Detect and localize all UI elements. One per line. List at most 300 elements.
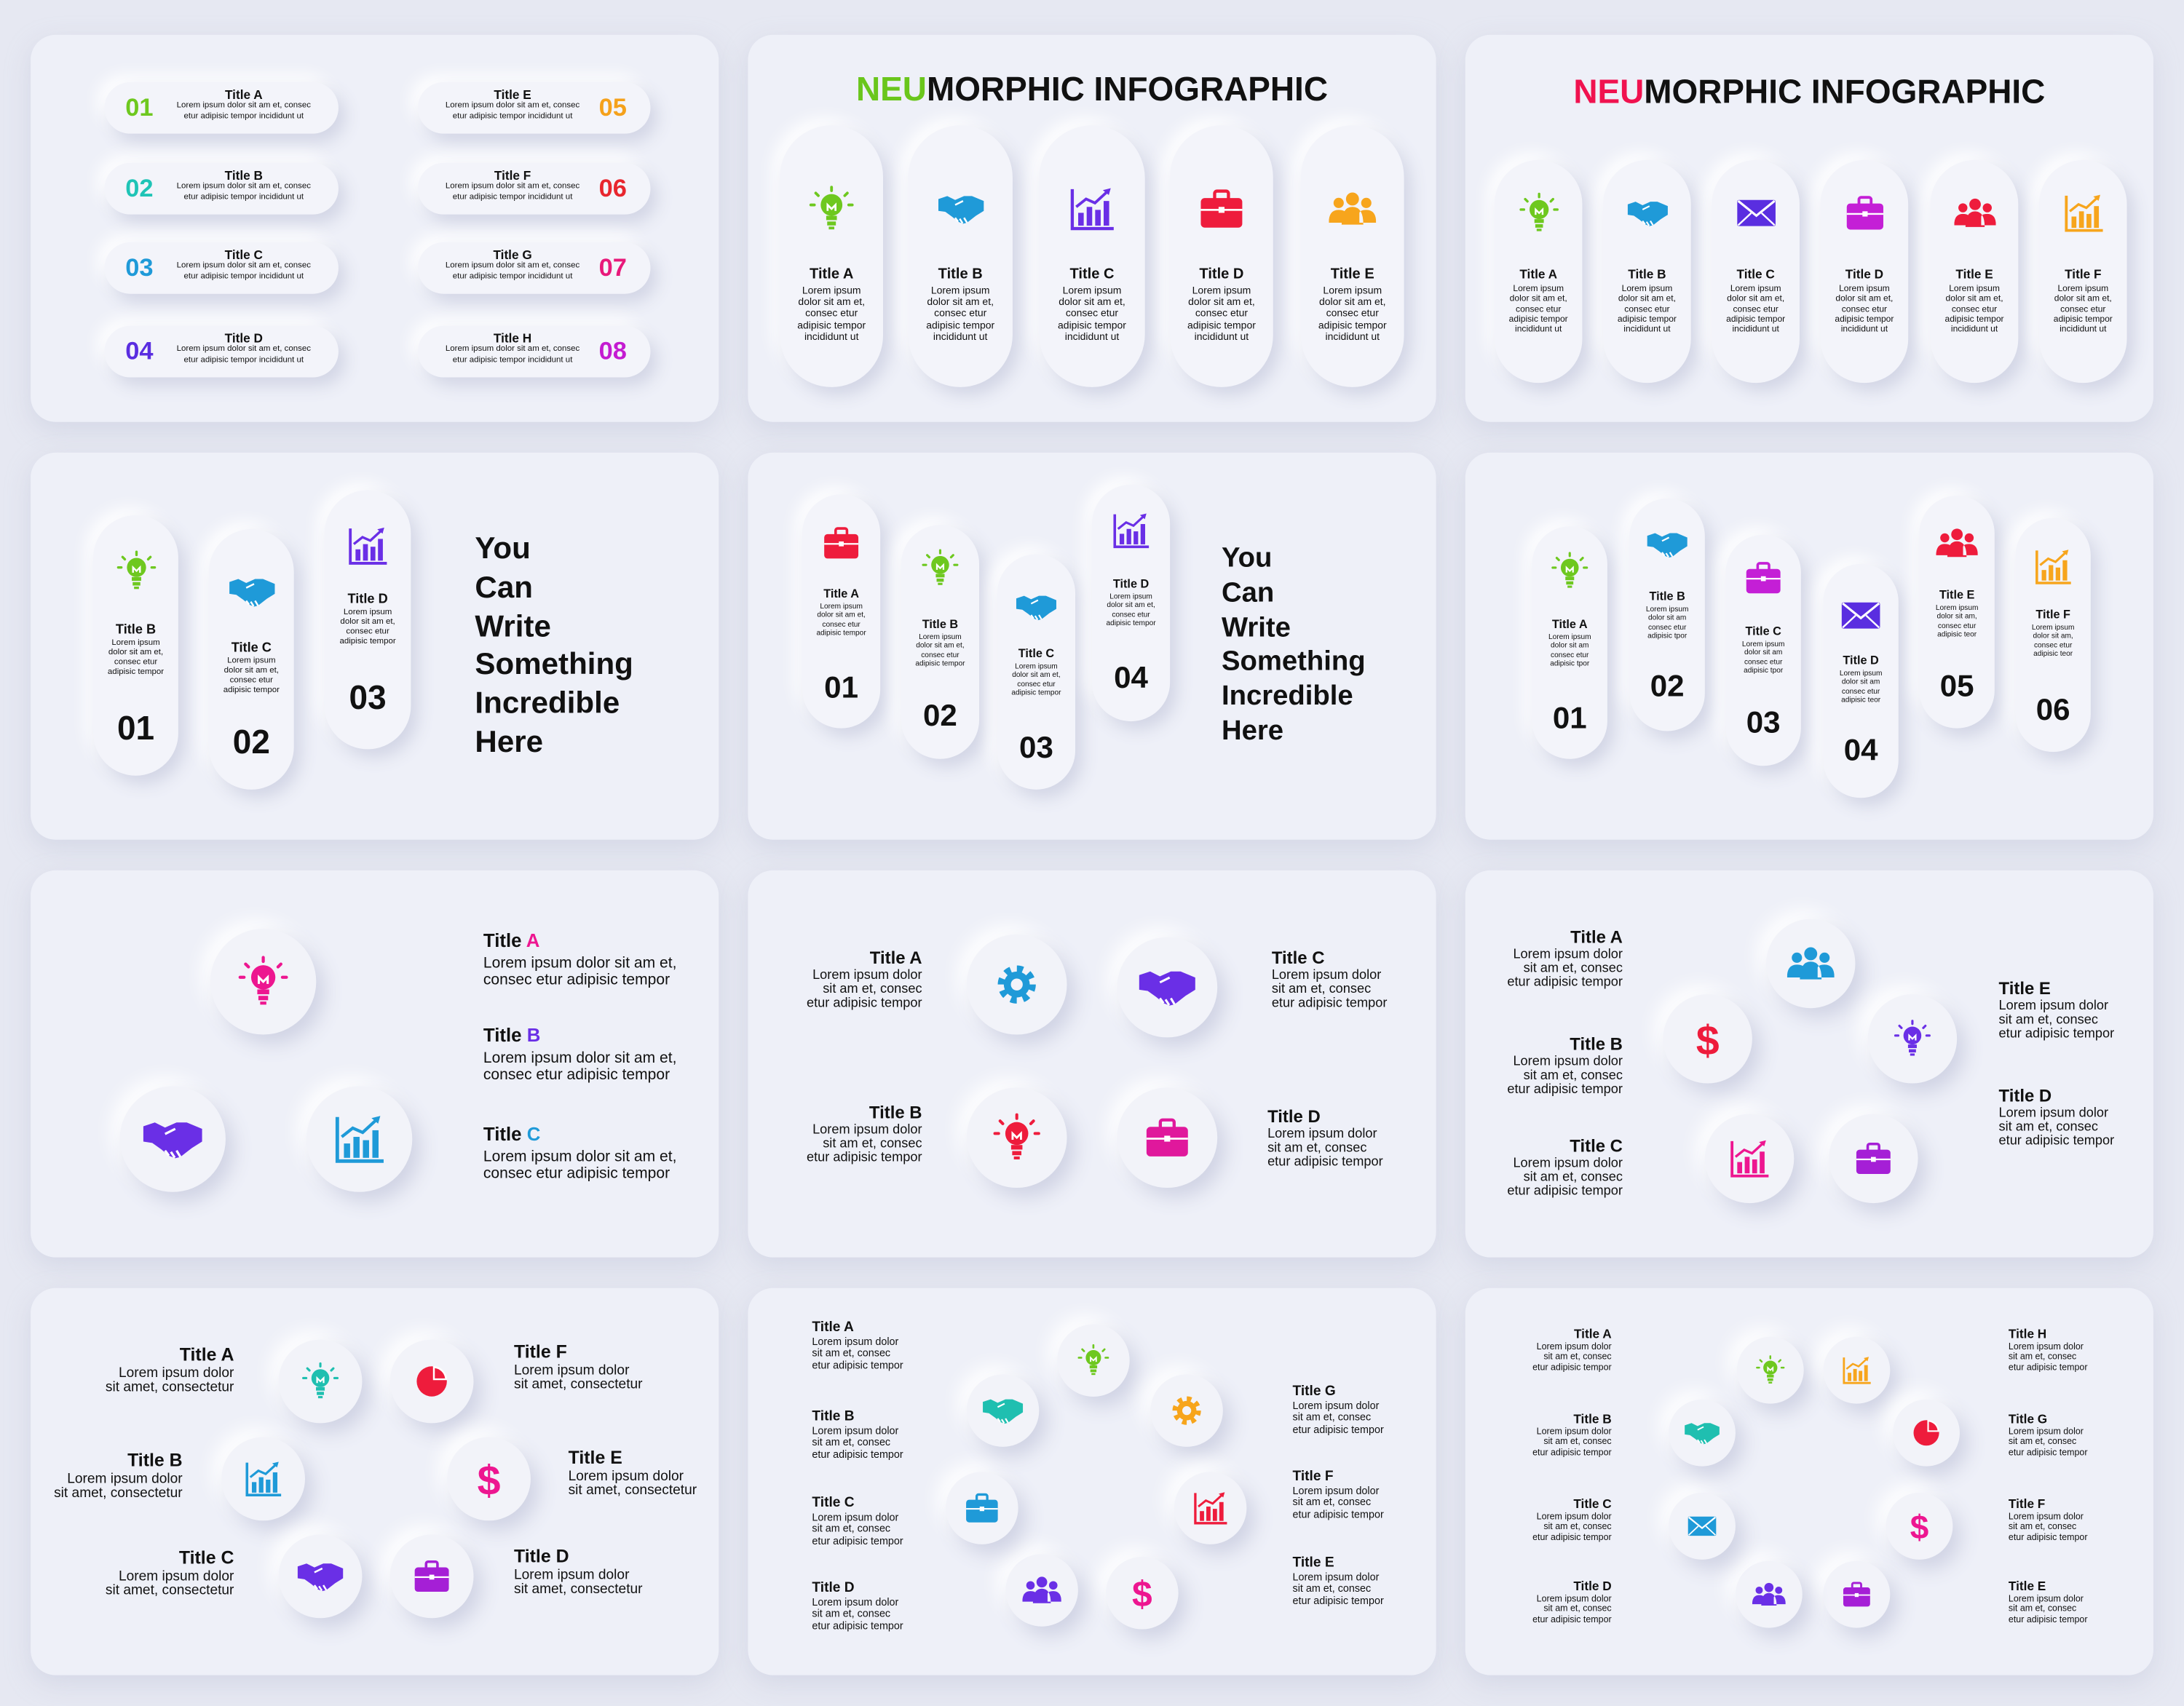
column E: consec etur <box>1326 307 1379 320</box>
pill 02: Title B <box>225 169 263 183</box>
circle: pie <box>390 1340 474 1423</box>
column B: Title B <box>1628 267 1666 281</box>
step 06: consec etur <box>2034 641 2072 650</box>
step 02: consec etur <box>921 651 960 659</box>
circle: handshake <box>1669 1400 1736 1467</box>
circle: people <box>1766 919 1855 1008</box>
step 04: dolor sit am <box>1842 678 1880 687</box>
circle: briefcase <box>390 1534 474 1618</box>
pill 01: etur adipisic tempor incididunt ut <box>183 112 304 120</box>
text E <box>568 1447 697 1499</box>
title: NEUMORPHIC INFOGRAPHIC <box>1573 74 2045 111</box>
text C: sit am et, consec <box>812 1522 890 1534</box>
text E: Title E <box>569 1447 622 1468</box>
text C <box>1272 948 1388 1011</box>
column A: consec etur <box>805 307 858 320</box>
step 02: Title B <box>1649 589 1685 603</box>
text D: sit amet, consectetur <box>514 1582 643 1598</box>
text F: Title F <box>2009 1497 2045 1511</box>
text E: etur adipisic tempor <box>1999 1026 2114 1042</box>
headline text <box>1222 543 1366 746</box>
step 02: consec etur <box>230 677 273 685</box>
step 01: dolor sit am et, <box>817 611 866 620</box>
text A: etur adipisic tempor <box>812 1358 903 1371</box>
text E: Lorem ipsum dolor <box>1293 1570 1379 1582</box>
text A: sit am et, consec <box>1524 961 1623 976</box>
column C: dolor sit am et, <box>1727 294 1784 304</box>
step 01: adipisic tempor <box>817 630 866 638</box>
text H: Title H <box>2009 1327 2046 1341</box>
text B: Lorem ipsum dolor <box>812 1424 898 1437</box>
step 03: dolor sit am <box>1744 649 1782 658</box>
step 01: Title A <box>1552 617 1588 631</box>
text G: sit am et, consec <box>2009 1437 2076 1447</box>
text D: Title D <box>514 1546 569 1566</box>
panel: 3 circles with titles <box>31 870 719 1258</box>
text C: Lorem ipsum dolor <box>1272 968 1381 983</box>
text A: sit am et, consec <box>1543 1352 1612 1362</box>
pill 01: Title A <box>225 88 263 102</box>
text E: etur adipisic tempor <box>1293 1594 1384 1606</box>
pill 07: etur adipisic tempor incididunt ut <box>453 272 572 281</box>
text G: Title G <box>2009 1412 2047 1426</box>
column A: Title A <box>810 266 853 282</box>
text A: sit amet, consectetur <box>106 1380 234 1395</box>
step 01: dolor sit am et, <box>108 649 163 657</box>
circle: mail <box>1669 1493 1736 1560</box>
pill 03: 03 <box>125 253 154 281</box>
column A: Lorem ipsum <box>802 284 861 297</box>
pill 06: Title F <box>494 169 531 183</box>
column C <box>1712 160 1800 383</box>
text G: etur adipisic tempor <box>1293 1422 1384 1435</box>
column E: dolor sit am et, <box>1319 295 1386 308</box>
pill 07: Lorem ipsum dolor sit am et, consec <box>446 262 579 270</box>
text E: etur adipisic tempor <box>2009 1614 2087 1624</box>
pill 08 <box>418 326 650 377</box>
text D <box>1999 1086 2114 1148</box>
pill 08: Title H <box>494 331 531 345</box>
headline text: Incredible <box>475 686 620 721</box>
step 04: 04 <box>1114 660 1148 695</box>
text D <box>514 1546 643 1598</box>
step 03: dolor sit am et, <box>340 618 395 627</box>
text A: Lorem ipsum dolor sit am et, <box>483 956 676 972</box>
text D: Lorem ipsum dolor <box>1537 1594 1612 1603</box>
text C: Lorem ipsum dolor <box>1513 1156 1623 1171</box>
column F: dolor sit am et, <box>2054 294 2112 304</box>
circle: briefcase <box>1117 1087 1217 1188</box>
column A: adipisic tempor <box>1509 314 1568 325</box>
text D: Lorem ipsum dolor <box>1267 1127 1377 1142</box>
text A <box>1507 927 1623 990</box>
column B: dolor sit am et, <box>1618 294 1676 304</box>
text D: Lorem ipsum dolor <box>812 1595 898 1608</box>
circle: handshake <box>279 1534 362 1618</box>
circle: chart <box>1823 1337 1890 1404</box>
text E <box>1999 979 2114 1042</box>
column A: dolor sit am et, <box>798 295 865 308</box>
column C: Title C <box>1737 267 1775 281</box>
pill 05: 05 <box>599 93 627 121</box>
step 01: Lorem ipsum <box>820 603 863 611</box>
column E: incididunt ut <box>1326 330 1380 342</box>
column B: dolor sit am et, <box>927 295 994 308</box>
text B: sit amet, consectetur <box>54 1485 183 1501</box>
step 04: Lorem ipsum <box>1840 670 1882 678</box>
column D: Title D <box>1845 267 1883 281</box>
circle: handshake <box>1117 937 1217 1037</box>
text A: Lorem ipsum dolor <box>1537 1341 1612 1352</box>
text E <box>2009 1579 2088 1624</box>
text B: Title B <box>1570 1035 1623 1054</box>
column C: consec etur <box>1733 304 1779 314</box>
step 04: Lorem ipsum <box>1109 593 1152 602</box>
panel: 6 circles ring <box>31 1288 719 1675</box>
step 02: adipisic tempor <box>915 660 965 668</box>
text D: sit am et, consec <box>1543 1604 1612 1614</box>
panel: 6 staggered steps <box>1465 453 2153 840</box>
circle: dollar <box>1663 994 1752 1084</box>
step 01: 01 <box>117 710 154 747</box>
text A: Lorem ipsum dolor <box>812 1335 898 1347</box>
text A: etur adipisic tempor <box>1532 1362 1612 1373</box>
text F: etur adipisic tempor <box>1293 1507 1384 1520</box>
pill 01 <box>104 82 339 134</box>
circle: chart <box>1174 1472 1246 1544</box>
text A: Lorem ipsum dolor <box>1513 947 1623 962</box>
step 01: adipisic tempor <box>108 668 164 677</box>
pill 08: 08 <box>599 337 627 365</box>
column B: incididunt ut <box>933 330 987 342</box>
text A: Title A <box>870 948 922 968</box>
circle: people <box>1005 1554 1078 1627</box>
pill 06 <box>418 163 650 215</box>
step 01: dolor sit am <box>1551 643 1588 651</box>
column B: Lorem ipsum <box>1622 284 1672 294</box>
step 02: dolor sit am et, <box>916 643 965 651</box>
text C: etur adipisic tempor <box>812 1534 903 1547</box>
step 01 <box>1532 526 1607 759</box>
column A: incididunt ut <box>1515 325 1562 335</box>
pill 02: 02 <box>125 174 154 202</box>
text D: Lorem ipsum dolor <box>1999 1106 2108 1121</box>
text B: sit am et, consec <box>1543 1437 1612 1447</box>
text F: Title F <box>1293 1469 1334 1485</box>
circle: handshake <box>120 1086 226 1192</box>
headline text: Write <box>1222 612 1291 643</box>
text D: etur adipisic tempor <box>1267 1154 1383 1170</box>
text C: sit am et, consec <box>1524 1170 1623 1185</box>
column C: Title C <box>1069 266 1115 282</box>
text A: Lorem ipsum dolor <box>119 1365 234 1381</box>
text B: Title B <box>483 1025 540 1046</box>
text B <box>483 1025 676 1084</box>
step 01: Lorem ipsum <box>1548 634 1591 642</box>
column A: adipisic tempor <box>797 318 866 331</box>
text A: Lorem ipsum dolor <box>812 968 922 983</box>
step 01: 01 <box>824 670 858 705</box>
column B: consec etur <box>934 307 986 320</box>
headline text: Here <box>1222 715 1283 746</box>
column E: consec etur <box>1952 304 1997 314</box>
step 06: 06 <box>2036 692 2070 727</box>
text B: Lorem ipsum dolor <box>1537 1427 1612 1437</box>
step 02 <box>209 529 294 790</box>
text F: sit am et, consec <box>2009 1522 2076 1532</box>
step 03: Lorem ipsum <box>1015 663 1058 671</box>
text H: etur adipisic tempor <box>2009 1362 2087 1373</box>
text B: Title B <box>869 1103 922 1122</box>
step 02: Lorem ipsum <box>227 657 276 666</box>
text C <box>106 1547 234 1598</box>
step 02: 02 <box>233 724 270 762</box>
step 03: consec etur <box>1017 681 1056 689</box>
panel: 7 circles ring <box>748 1288 1436 1675</box>
column D: consec etur <box>1842 304 1887 314</box>
text B: Lorem ipsum dolor <box>1513 1054 1623 1069</box>
pill 02 <box>104 163 339 215</box>
text B: Lorem ipsum dolor <box>812 1122 922 1138</box>
column E: adipisic tempor <box>1318 318 1387 331</box>
text D: Title D <box>1267 1107 1321 1127</box>
step 01: adipisic tpor <box>1550 660 1589 668</box>
column D: incididunt ut <box>1195 330 1249 342</box>
circle: dollar <box>1886 1493 1952 1560</box>
step 03: Title D <box>347 592 388 607</box>
column E <box>1931 160 2018 383</box>
text H <box>2009 1327 2088 1373</box>
step 03: consec etur <box>1744 658 1782 667</box>
column F: Title F <box>2065 267 2101 281</box>
step 01: 01 <box>1553 700 1587 735</box>
text A: Title A <box>483 930 539 951</box>
step 05: consec etur <box>1938 622 1976 630</box>
text C <box>812 1496 903 1547</box>
text C: etur adipisic tempor <box>1507 1183 1623 1199</box>
pill 04: etur adipisic tempor incididunt ut <box>183 356 304 364</box>
text D: Lorem ipsum dolor <box>514 1567 629 1582</box>
circle: bulb <box>1057 1325 1130 1397</box>
text E: Title E <box>1293 1555 1334 1571</box>
text D: Title D <box>1999 1086 2052 1106</box>
step 01: Title A <box>823 586 859 600</box>
step 03 <box>1726 535 1801 766</box>
step 01: consec etur <box>114 659 157 667</box>
step 04: dolor sit am et, <box>1107 602 1155 611</box>
text A: Title A <box>1574 1327 1612 1341</box>
column C: Lorem ipsum <box>1730 284 1781 294</box>
text F: Title F <box>514 1341 567 1362</box>
text D <box>1532 1579 1612 1624</box>
step 06: Lorem ipsum <box>2032 624 2074 632</box>
pill 08: Lorem ipsum dolor sit am et, consec <box>446 345 579 354</box>
text B <box>1532 1412 1612 1457</box>
step 05: Lorem ipsum <box>1936 604 1978 613</box>
text C: Title C <box>483 1124 540 1145</box>
panel: 4 staggered steps <box>748 453 1436 840</box>
text C: Lorem ipsum dolor <box>119 1568 234 1584</box>
column C: Lorem ipsum <box>1063 284 1121 297</box>
text B: Lorem ipsum dolor <box>67 1471 183 1486</box>
panel: numbered list 01-08 <box>31 35 719 422</box>
text E: sit amet, consectetur <box>569 1483 697 1499</box>
column F <box>2039 160 2127 383</box>
text A <box>812 1320 903 1371</box>
step 03 <box>325 490 411 749</box>
column B <box>1603 160 1691 383</box>
step 01 <box>93 515 178 776</box>
step 02: Title C <box>232 640 272 656</box>
step 03: adipisic tempor <box>1011 689 1061 697</box>
text C <box>483 1124 676 1182</box>
circle: chart <box>1705 1114 1794 1203</box>
text B <box>812 1409 903 1460</box>
column A: Title A <box>1519 267 1557 281</box>
column D: adipisic tempor <box>1835 314 1894 325</box>
headline text: Write <box>475 608 551 643</box>
column E: Title E <box>1331 266 1374 282</box>
step 04: adipisic tempor <box>1106 619 1156 628</box>
headline text <box>475 531 633 759</box>
column F: adipisic tempor <box>2054 314 2113 325</box>
text D: etur adipisic tempor <box>1999 1133 2114 1148</box>
headline text: Something <box>475 647 633 681</box>
column C: incididunt ut <box>1065 330 1119 342</box>
text D <box>1267 1107 1383 1170</box>
text A: Title A <box>812 1320 854 1336</box>
text B: etur adipisic tempor <box>807 1150 922 1165</box>
text B <box>54 1450 183 1501</box>
step 02: Lorem ipsum <box>919 634 962 642</box>
text A: consec etur adipisic tempor <box>483 972 670 988</box>
text B: Lorem ipsum dolor sit am et, <box>483 1050 676 1067</box>
text E: sit am et, consec <box>2009 1604 2076 1614</box>
step 01: Title B <box>116 622 156 638</box>
pill 04: Lorem ipsum dolor sit am et, consec <box>177 345 311 354</box>
step 05 <box>1919 496 1995 729</box>
text F: sit am et, consec <box>1293 1496 1371 1508</box>
pill 01: Lorem ipsum dolor sit am et, consec <box>177 102 311 110</box>
pill 08: etur adipisic tempor incididunt ut <box>453 356 572 364</box>
column D: incididunt ut <box>1841 325 1888 335</box>
headline text: Something <box>1222 647 1366 678</box>
pill 07: Title G <box>493 248 532 262</box>
column B: consec etur <box>1624 304 1670 314</box>
step 03: 03 <box>349 680 387 717</box>
column B: incididunt ut <box>1623 325 1671 335</box>
text C <box>1507 1136 1623 1199</box>
step 02: 02 <box>923 698 957 732</box>
column C: adipisic tempor <box>1726 314 1785 325</box>
circle: gear <box>1150 1374 1223 1447</box>
pill 02: Lorem ipsum dolor sit am et, consec <box>177 183 311 191</box>
step 02: Title B <box>922 617 958 631</box>
column A <box>1495 160 1582 383</box>
headline text: Can <box>475 569 533 604</box>
circle: briefcase <box>1823 1561 1890 1628</box>
column F: Lorem ipsum <box>2057 284 2108 294</box>
text A <box>483 930 676 988</box>
text G: Title G <box>1293 1384 1336 1400</box>
text B: Title B <box>127 1450 183 1470</box>
headline text: Can <box>1222 578 1274 608</box>
text F: etur adipisic tempor <box>2009 1533 2087 1542</box>
pill 03 <box>104 242 339 294</box>
text C <box>1532 1497 1612 1542</box>
step 01: Lorem ipsum <box>111 639 160 648</box>
column B <box>908 125 1013 387</box>
text C: Title C <box>1272 948 1324 968</box>
column D: Lorem ipsum <box>1839 284 1890 294</box>
column D: Title D <box>1199 266 1243 282</box>
circle: people <box>1736 1561 1803 1628</box>
text E: Title E <box>1999 979 2051 999</box>
text G: sit am et, consec <box>1293 1411 1371 1423</box>
column E: Lorem ipsum <box>1949 284 2000 294</box>
text B <box>1507 1035 1623 1098</box>
circle: chart <box>221 1437 305 1520</box>
circle: bulb <box>210 929 316 1035</box>
step 02: consec etur <box>1648 623 1686 632</box>
column D: Lorem ipsum <box>1192 284 1251 297</box>
text F <box>2009 1497 2088 1542</box>
column E: adipisic tempor <box>1945 314 2004 325</box>
text C: Title C <box>812 1496 855 1511</box>
step 03: Lorem ipsum <box>344 608 392 617</box>
step 03: adipisic tempor <box>339 638 396 646</box>
step 02 <box>901 525 979 759</box>
step 02: adipisic tpor <box>1647 632 1687 640</box>
column B: adipisic tempor <box>926 318 994 331</box>
text C: sit am et, consec <box>1272 982 1371 997</box>
circle: briefcase <box>1829 1114 1918 1203</box>
step 02: Lorem ipsum <box>1646 606 1688 614</box>
step 05: Title E <box>1939 587 1974 602</box>
step 02: dolor sit am et, <box>224 667 279 675</box>
text B <box>807 1103 922 1165</box>
step 06: Title F <box>2035 607 2070 621</box>
step 04: Title D <box>1843 653 1879 667</box>
headline text: Here <box>475 724 543 759</box>
step 06: dolor sit am, <box>2033 632 2073 641</box>
text D: sit am et, consec <box>1999 1119 2098 1135</box>
text A <box>106 1344 234 1395</box>
panel: 3 steps with headline <box>31 453 719 840</box>
text G: Lorem ipsum dolor <box>2009 1427 2084 1437</box>
text C: Title C <box>1570 1136 1623 1156</box>
column A: consec etur <box>1516 304 1561 314</box>
text C: sit amet, consectetur <box>106 1583 234 1598</box>
text C: sit am et, consec <box>1543 1522 1612 1532</box>
column D: adipisic tempor <box>1187 318 1256 331</box>
circle: bulb <box>1868 994 1957 1084</box>
text G: etur adipisic tempor <box>2009 1448 2087 1457</box>
column D <box>1821 160 1908 383</box>
text H: Lorem ipsum dolor <box>2009 1341 2084 1352</box>
text F: Lorem ipsum dolor <box>2009 1512 2084 1521</box>
text C: Title C <box>1573 1497 1612 1511</box>
circle: briefcase <box>946 1472 1018 1544</box>
pill 06: 06 <box>599 174 627 202</box>
column D: dolor sit am et, <box>1835 294 1893 304</box>
pill 04: 04 <box>125 337 154 365</box>
headline text: You <box>475 531 531 566</box>
text A: sit am et, consec <box>812 1346 890 1359</box>
column A: dolor sit am et, <box>1510 294 1567 304</box>
text C: Lorem ipsum dolor <box>1537 1512 1612 1521</box>
text B: sit am et, consec <box>823 1136 922 1151</box>
